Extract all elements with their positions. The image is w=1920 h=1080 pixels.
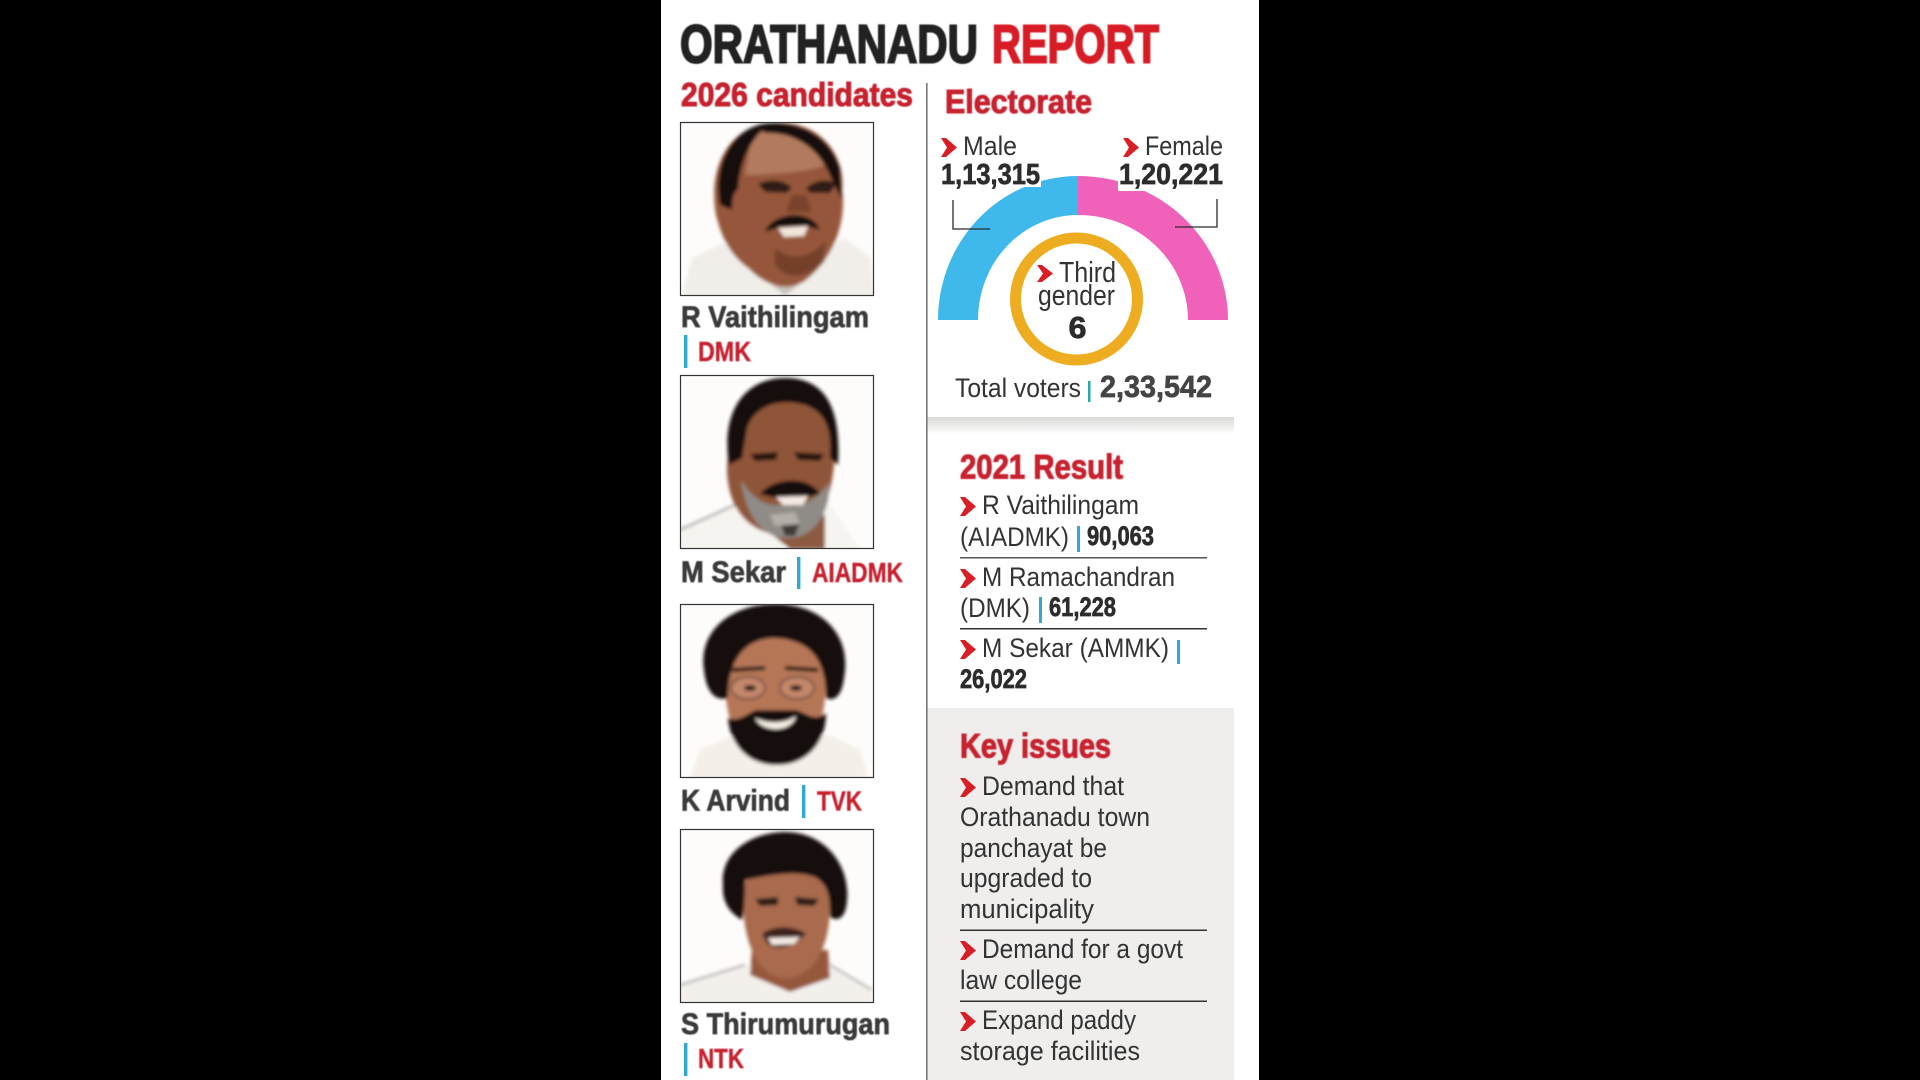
total voters: 2,33,542: [1100, 369, 1212, 404]
issue: municipality demand: panchayat be: [960, 833, 1107, 863]
name and party: M Sekar, AIADMK: AIADMK: [812, 557, 903, 588]
result: M Ramachandran: M Ramachandran: [982, 562, 1175, 592]
result: R Vaithilingam: 90,063: [1087, 521, 1154, 551]
result: R Vaithilingam: R Vaithilingam: [982, 490, 1139, 520]
result: M Sekar: 26,022: [960, 664, 1027, 694]
result: R Vaithilingam: (AIADMK): [960, 522, 1069, 552]
party: DMK: [684, 335, 751, 368]
white page panel: [661, 0, 1259, 1080]
result: M Ramachandran: [960, 562, 1175, 623]
ring: third gender: Third: [1059, 257, 1116, 289]
chart: male arc: [938, 176, 1078, 320]
name and party: K Arvind, TVK: TVK: [817, 786, 862, 816]
title: REPORT: [992, 14, 1159, 74]
issue: municipality demand: upgraded to: [960, 863, 1092, 893]
photo: S Thirumurugan: [680, 829, 874, 1003]
issue: municipality demand: Demand that: [982, 771, 1124, 801]
heading: 2021 Result: 2021 Result: [960, 448, 1123, 486]
party: DMK: DMK: [698, 336, 751, 367]
result: M Ramachandran: (DMK): [960, 593, 1030, 623]
label: male: Male: [963, 131, 1017, 161]
name and party: K Arvind, TVK: [681, 784, 862, 818]
result: M Ramachandran: 61,228: [1049, 592, 1116, 622]
issue: municipality demand: municipality: [960, 894, 1094, 924]
result: M Sekar: M Sekar (AMMK): [982, 633, 1169, 663]
leader line: male: [953, 200, 990, 229]
grey separator band: [927, 417, 1234, 434]
ring: third gender: gender: [1038, 280, 1115, 312]
result: M Sekar: [960, 633, 1180, 694]
label: female: Female: [1145, 131, 1223, 161]
label: male: [941, 131, 1040, 191]
party: NTK: [684, 1043, 744, 1076]
title: ORATHANADU: [680, 14, 978, 74]
issue: paddy storage: [960, 1005, 1140, 1066]
panel: key issues: [960, 728, 1207, 1066]
photo: K Arvind: [680, 604, 874, 778]
panel: electorate: [938, 83, 1228, 404]
ring: third gender: 6: [1068, 310, 1086, 345]
name and party: M Sekar, AIADMK: [681, 556, 903, 589]
panel: 2021 result: [960, 448, 1207, 694]
heading: 2026 candidates: 2026 candidates: [681, 76, 913, 113]
heading: Key issues: Key issues: [960, 728, 1111, 766]
chart: female arc: [1078, 176, 1228, 320]
heading: Electorate: Electorate: [945, 83, 1092, 120]
issue: law college: [960, 934, 1183, 995]
issue: law college: Demand for a govt: [982, 934, 1183, 964]
total voters: Total voters: [955, 373, 1081, 403]
label: female: [1119, 131, 1223, 191]
total voters: [955, 369, 1212, 404]
photo: M Sekar: [680, 375, 874, 549]
result: R Vaithilingam: [960, 490, 1154, 552]
name: R Vaithilingam: R Vaithilingam: [681, 301, 869, 334]
name: S Thirumurugan: S Thirumurugan: [681, 1008, 890, 1041]
ring: third gender: [1016, 238, 1138, 360]
issue: municipality demand: Orathanadu town: [960, 802, 1150, 832]
leader line: female: [1175, 199, 1217, 227]
name and party: M Sekar, AIADMK: M Sekar: [681, 556, 786, 589]
column divider: [926, 83, 928, 1080]
name and party: K Arvind, TVK: K Arvind: [681, 784, 790, 818]
label: male: 1,13,315: [941, 159, 1040, 191]
issue: paddy storage: Expand paddy: [982, 1005, 1136, 1035]
issue: paddy storage: storage facilities: [960, 1036, 1140, 1066]
photo: R Vaithilingam: [680, 122, 874, 296]
issue: municipality demand: [960, 771, 1150, 924]
label: female: 1,20,221: [1119, 159, 1223, 191]
panel: 2026 candidates: [680, 76, 913, 1076]
panel: key issues background: [927, 708, 1234, 1080]
party: NTK: NTK: [698, 1043, 744, 1074]
issue: law college: law college: [960, 965, 1082, 995]
